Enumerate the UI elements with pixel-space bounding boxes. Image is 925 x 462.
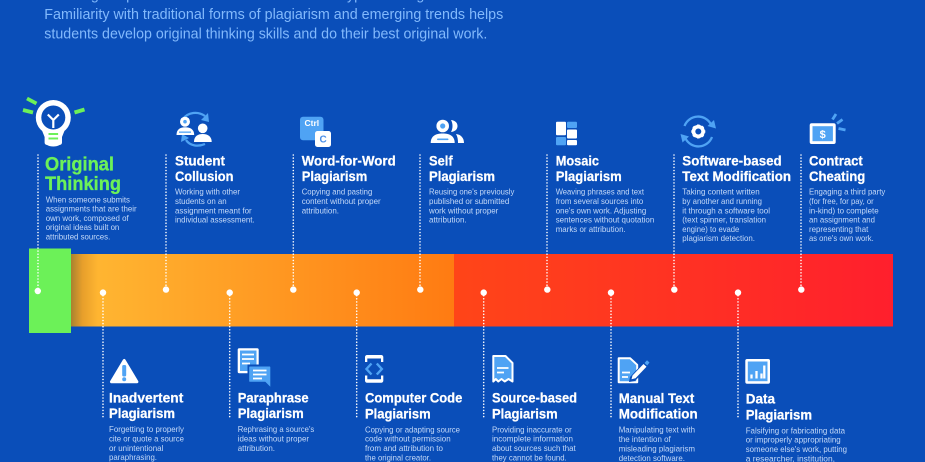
description: someone else's work, putting [746,444,847,454]
description: it through a software tool [682,205,770,215]
description: in-kind) to complete [809,205,879,215]
description: misleading plagiarism [619,444,695,454]
description [682,187,770,243]
description: or unintentional [109,443,163,453]
icon: mosaic blocks [556,122,577,145]
icon: document and pencil [619,358,650,382]
description: assignment meant for [175,205,252,215]
description: incomplete information [492,434,573,444]
icon: ctrl c keys: Ctrl [304,118,319,128]
icon: gear with arrows [680,117,716,146]
description: (for free, for pay, or [809,196,874,206]
description: code without permission [365,434,451,444]
intro paragraph [44,0,503,42]
intro paragraph: students develop original thinking skills and do their best original work. [44,26,487,42]
description: published or submitted [429,196,510,206]
description [238,424,314,453]
description: cite or quote a source [109,433,184,443]
heading: Self [429,153,453,169]
description [428,187,515,225]
description [302,187,381,215]
description [492,424,576,462]
description: ideas without proper [238,433,309,443]
item: Student Collusion [175,113,255,225]
description: about sources such that [492,443,576,453]
description: students on an [175,196,227,206]
item: Original Thinking [23,98,137,242]
description: Rephrasing a source's [238,424,314,434]
green original thinking block [29,248,71,333]
heading: Inadvertent [109,389,184,405]
description: attribution. [302,205,339,215]
item: Data Plagiarism [745,359,847,462]
heading [746,390,812,422]
description: Reusing one's previously [429,187,515,197]
heading [175,153,234,184]
heading: Plagiarism [302,168,367,184]
item: Paraphrase Plagiarism [238,348,314,453]
heading: Plagiarism [492,405,558,421]
item: Self Plagiarism [428,120,515,225]
description: content without proper [302,196,381,206]
description: Weaving phrases and text [556,187,645,197]
description [556,187,654,234]
description: original ideas built on [46,222,119,232]
intro paragraph: Familiarity with traditional forms of plagiarism and emerging trends helps [44,7,503,23]
icon: students with arrows [176,113,212,146]
icon: document and speech bubble [238,348,272,388]
heading [809,153,865,184]
description: Manipulating text with [619,425,695,435]
heading: Manual Text [619,390,695,406]
description: When someone submits [46,194,130,204]
description: an assignment and [809,215,875,225]
heading: Paraphrase [238,390,309,406]
description: paraphrasing. [109,452,157,462]
heading: Plagiarism [429,168,495,184]
heading: Plagiarism [746,406,812,422]
heading: Plagiarism [365,405,431,421]
description [809,187,886,243]
heading: Plagiarism [238,405,304,421]
heading [238,390,309,421]
heading: Computer Code [365,390,462,406]
heading [302,153,396,184]
heading: Original Thinking [45,155,121,195]
description: engine) to evade [682,224,739,234]
item: Manual Text Modification [619,358,698,462]
heading [109,389,184,421]
heading: Collusion [175,168,234,184]
item: Inadvertent Plagiarism [109,360,185,462]
description [109,424,185,462]
description: work without proper [428,205,498,215]
heading: Mosaic [556,153,599,169]
heading: Cheating [809,168,865,184]
description [46,194,137,242]
heading [682,153,791,184]
heading: Source-based [492,390,577,406]
description: Providing inaccurate or [492,424,572,434]
heading: Original Thinking: Original [45,155,114,176]
item: Contract Cheating [809,114,886,243]
description: own work, composed of [46,213,129,223]
description: Falsifying or fabricating data [746,425,845,435]
description: representing that [809,224,869,234]
description: Copying or adapting source [365,424,460,434]
description: (text spinner, translation [682,215,766,225]
description: by another and running [682,196,762,206]
description: Copying and pasting [302,187,372,197]
description: attribution. [429,215,467,225]
icon: light bulb [23,98,84,146]
item: Word-for-Word Plagiarism [300,117,396,215]
heading: Modification [619,406,698,422]
description: assignments that are their [46,204,137,214]
description: Forgetting to properly [109,424,185,434]
heading: Text Modification [682,168,791,184]
icon: ctrl c keys: C [320,134,327,146]
heading [556,153,622,184]
item: Source-based Plagiarism [492,356,577,462]
spectrum bar [29,248,893,333]
description: sentences without quotation [556,215,654,225]
icon: code brackets [365,355,383,383]
icon: payment screen: $ [820,129,826,141]
icon: bar chart [745,359,770,384]
heading [619,390,698,422]
description: plagiarism detection. [682,233,755,243]
description: Working with other [175,187,240,197]
description [365,424,460,462]
heading: Contract [809,153,863,169]
item: Computer Code Plagiarism [365,355,462,462]
description [619,425,695,462]
description [175,187,255,225]
heading: Data [746,390,775,406]
description: one's own work. Adjusting [556,205,646,215]
description: marks or attribution. [556,224,626,234]
icon: warning triangle [112,360,137,382]
description: Taking content written [682,187,760,197]
icon: ctrl c keys [300,117,331,147]
heading: Plagiarism [556,168,622,184]
description [746,425,847,462]
description: from several sources into [556,196,644,206]
heading: Original Thinking: Thinking [45,174,121,195]
description: individual assessment. [175,215,255,225]
heading: Plagiarism [109,405,175,421]
icon: person with shadow [431,120,464,143]
heading: Software-based [682,153,782,169]
item: Mosaic Plagiarism [556,122,654,234]
description: or improperly appropriating [746,435,841,445]
heading [429,153,495,184]
heading: Student [175,153,225,169]
description: attribution. [238,443,275,453]
heading [492,390,577,421]
description: attributed sources. [46,232,110,242]
description: as one's own work. [809,233,874,243]
heading: Word-for-Word [302,153,396,169]
description: from and attribution to [365,443,443,453]
item: Software-based Text Modification [680,117,791,243]
connector lines and markers [35,155,805,419]
description: the intention of [619,434,671,444]
heading [365,390,462,421]
description: Engaging a third party [809,187,886,197]
icon: torn document [493,356,512,382]
